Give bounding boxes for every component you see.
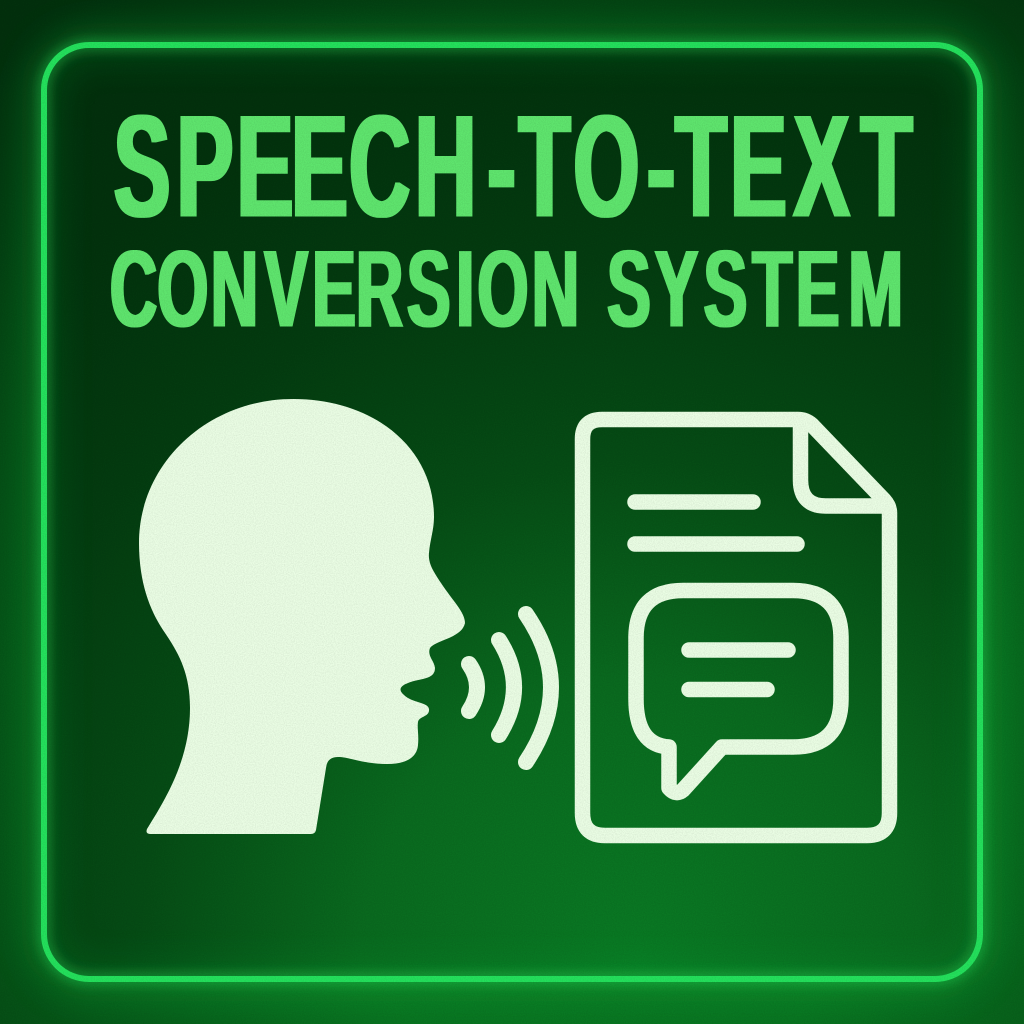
title: [110, 86, 912, 351]
wave large: [526, 614, 551, 762]
text line 2: [635, 536, 797, 552]
document fold: [800, 422, 888, 506]
title line 2: CONVERSION SYSTEM: [110, 228, 903, 351]
title line 1: SPEECH-TO-TEXT: [114, 86, 912, 248]
speech bubble: [636, 590, 841, 793]
text line 1: [635, 494, 753, 510]
wave medium: [499, 640, 514, 735]
icon: document with speech bubble: [582, 420, 890, 836]
icon: speaking head: [139, 399, 465, 834]
icon: sound waves: [469, 614, 551, 762]
bubble line 1: [689, 642, 788, 658]
wave small: [469, 664, 477, 711]
document outline: [582, 420, 890, 836]
bubble line 2: [689, 682, 767, 697]
